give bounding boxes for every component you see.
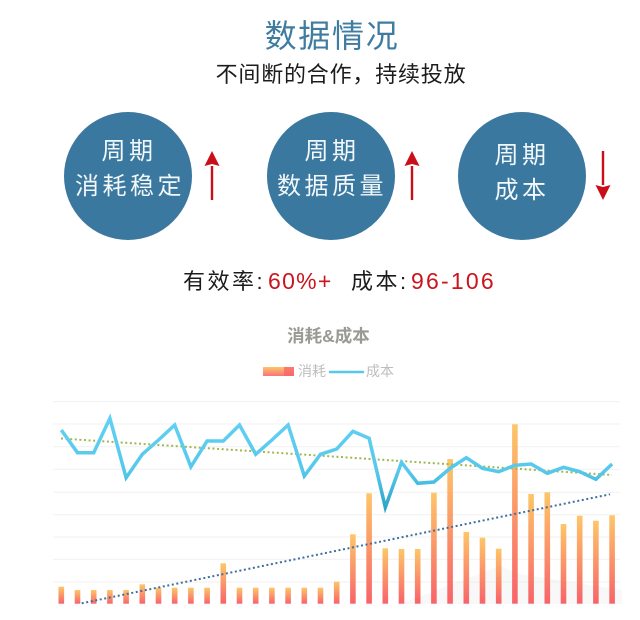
title: 数据情况 [265, 18, 399, 54]
summary: efficiency and cost: 成本: [351, 269, 409, 294]
bars: consumption [58, 424, 615, 604]
subtitle: 不间断的合作，持续投放 [216, 62, 466, 87]
summary: efficiency and cost: 有效率: [183, 269, 265, 294]
metric: cycle cost down: 成本 [494, 177, 550, 204]
metric: cycle cost down: 周期 [494, 142, 550, 169]
metric: cycle consumption stability up: 消耗稳定 [75, 173, 185, 200]
metric: cycle consumption stability up: 周期 [102, 138, 156, 165]
metric: cycle cost down [458, 112, 610, 240]
chart legend: 消耗 [298, 363, 326, 379]
combo chart: consumption bars and cost line [53, 402, 622, 604]
summary: efficiency and cost: 60%+ [268, 268, 333, 294]
chart legend [263, 363, 394, 379]
chart title: 消耗&成本 [287, 326, 370, 346]
metric: cycle data quality up: 数据质量 [277, 173, 387, 200]
trendline: cost [61, 438, 612, 475]
chart legend: 成本 [366, 363, 394, 379]
line: cost [61, 418, 612, 507]
metric: cycle consumption stability up [64, 112, 220, 240]
summary: efficiency and cost [183, 268, 496, 294]
trendline: consumption [82, 494, 610, 603]
summary: efficiency and cost: 96-106 [411, 268, 496, 294]
metric: cycle data quality up: 周期 [304, 138, 360, 165]
metric: cycle data quality up [267, 112, 420, 240]
